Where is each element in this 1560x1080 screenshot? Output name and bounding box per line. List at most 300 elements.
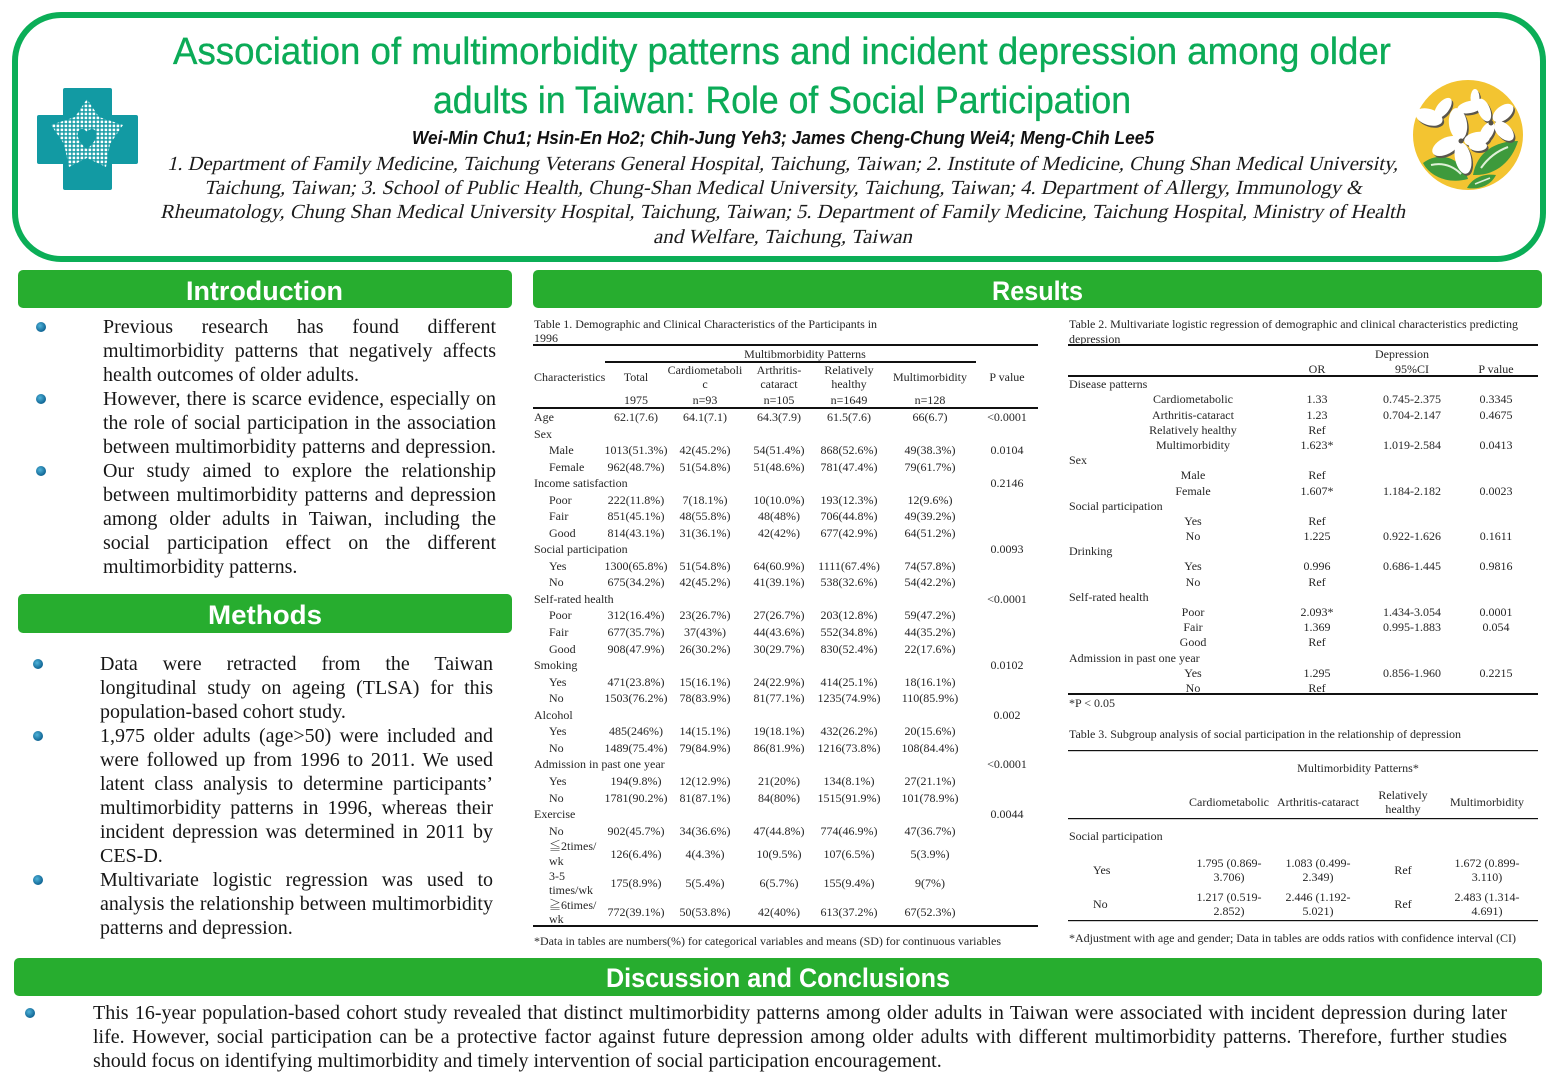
table 3 body rows: Yes	[1093, 863, 1111, 877]
table 1 body rows: Admission in past one year	[534, 757, 665, 771]
section heading: Methods: Methods	[208, 600, 322, 630]
table 2 body rows	[1069, 377, 1512, 695]
table 2 body rows: Drinking	[1069, 544, 1112, 558]
table 2 column headers: P value	[1478, 362, 1514, 376]
text block: introduction: multimorbidity patterns that negatively affects	[103, 340, 496, 362]
section heading: Methods	[18, 594, 512, 633]
table 1 body rows: 81(87.1%)	[680, 791, 730, 805]
text block: methods: CES-D.	[100, 845, 163, 867]
table 1 body rows: 44(43.6%)	[754, 625, 804, 639]
table 2 body rows: No	[1186, 681, 1200, 695]
table 1 body rows: 48(48%)	[758, 509, 800, 523]
table 2 caption: Table 2. Multivariate logistic regression of demographic and clinical characteristics predicting	[1069, 317, 1518, 331]
table 3 column headers	[1189, 761, 1524, 816]
table 2 caption	[1069, 317, 1518, 346]
table 1 body rows: 0.0044	[990, 807, 1024, 821]
table 3 body rows: No	[1093, 897, 1108, 911]
table 1 body rows: 6(5.7%)	[760, 876, 798, 890]
table 1 body rows: 10(9.5%)	[756, 847, 802, 861]
table 1 body rows: 1235(74.9%)	[818, 691, 880, 705]
section heading: Discussion and Conclusions	[14, 958, 1542, 996]
table 1 body rows: wk	[549, 854, 564, 868]
table 1 body rows: 66(6.7)	[912, 410, 948, 424]
table 2 body rows: Ref	[1308, 681, 1326, 695]
table 1 body rows: 27(26.7%)	[754, 608, 804, 622]
table 1 body rows: 0.0093	[990, 542, 1024, 556]
table 2 body rows: Fair	[1183, 620, 1203, 634]
section heading: Introduction: Introduction	[186, 276, 343, 306]
section heading: Results: Results	[992, 276, 1083, 306]
table 1 body rows: 79(84.9%)	[680, 741, 730, 755]
table 2 body rows: Ref	[1308, 468, 1326, 482]
table 1 body rows: 51(48.6%)	[754, 460, 804, 474]
table 1 column headers: 1975	[624, 393, 648, 407]
table 1 body rows: 42(40%)	[758, 905, 800, 919]
table 1 column headers: Multimorbidity	[893, 370, 967, 384]
table 1 body rows: 64(51.2%)	[904, 526, 956, 540]
table 1 rules	[533, 344, 1038, 927]
table 2 column headers: Depression	[1375, 347, 1429, 361]
table 1 body rows: No	[549, 824, 564, 838]
text block: methods	[100, 653, 493, 939]
text block: discussion and conclusions: This 16-year population-based cohort study revealed that distinct multimorbidity patterns among older adults in Taiwan were associated with incident depression during later	[93, 1002, 1507, 1024]
text block: methods: analysis the relationship between multimorbidity	[100, 893, 493, 915]
header panel	[15, 15, 1543, 259]
table 2 body rows: Yes	[1184, 559, 1202, 573]
table 1 body rows: 44(35.2%)	[904, 625, 956, 639]
table 1 body rows: 27(21.1%)	[904, 774, 956, 788]
table 1 body rows: 41(39.1%)	[754, 575, 804, 589]
table 2 body rows: Female	[1175, 484, 1211, 498]
table 1 body rows: 9(7%)	[915, 876, 945, 890]
table 1 body rows: Poor	[549, 608, 572, 622]
table 3 body rows: 5.021)	[1302, 904, 1334, 918]
table 1 body rows: Age	[534, 410, 554, 424]
table 1 caption: Table 1. Demographic and Clinical Characteristics of the Participants in	[534, 317, 877, 331]
table 1 body rows: 51(54.8%)	[680, 559, 730, 573]
table 1 body rows: 538(32.6%)	[820, 575, 878, 589]
header border	[15, 15, 1543, 259]
table 1 body rows: 902(45.7%)	[608, 824, 664, 838]
table 1 body rows: 203(12.8%)	[820, 608, 878, 622]
text block: methods: multimorbidity patterns in 1996, whereas their	[100, 797, 493, 819]
table 2 body rows: 1.623*	[1300, 438, 1334, 452]
table 2 body rows: 0.686-1.445	[1383, 559, 1441, 573]
table 3 column headers: Cardiometabolic	[1189, 795, 1269, 809]
table 1 body rows: 59(47.2%)	[904, 608, 956, 622]
section heading: Introduction	[18, 270, 512, 308]
table 3 body rows: 3.110)	[1472, 870, 1502, 884]
table 3 body rows: 2.852)	[1214, 904, 1244, 918]
table 1 body rows: 0.0102	[990, 658, 1024, 672]
table 1 body rows: ≧6times/	[549, 898, 597, 912]
table 1 column headers: Relatively	[824, 363, 874, 377]
table 2 body rows: Good	[1180, 635, 1206, 649]
text block: introduction: among older adults in Taiwan, including the	[103, 508, 496, 530]
table 1 body rows: 1111(67.4%)	[818, 559, 880, 573]
table 1 column headers: Total	[624, 370, 649, 384]
table 1 body rows: 0.0104	[990, 443, 1024, 457]
title: Association of multimorbidity patterns and incident depression among older	[173, 31, 1391, 73]
table 1 body rows: 101(78.9%)	[902, 791, 958, 805]
table 3 column headers: Arthritis-cataract	[1277, 795, 1360, 809]
affiliations	[159, 153, 1409, 248]
table 1 body rows: 0.002	[994, 708, 1020, 722]
table 1 body rows: 14(15.1%)	[680, 724, 730, 738]
table 2 body rows: 1.369	[1304, 620, 1330, 634]
icon: petal shadows	[1415, 91, 1519, 177]
table 1 body rows: 47(36.7%)	[904, 824, 956, 838]
table 1 body rows: 24(22.9%)	[754, 675, 804, 689]
section heading: Discussion and Conclusions: Discussion and Conclusions	[606, 963, 950, 993]
table 1 body rows: 37(43%)	[684, 625, 726, 639]
table 1 body rows: 49(39.2%)	[904, 509, 956, 523]
text block: introduction: However, there is scarce evidence, especially on	[103, 388, 496, 410]
table 1 body rows: No	[549, 575, 564, 589]
table 1 body rows: 552(34.8%)	[820, 625, 878, 639]
table 1 body rows: 414(25.1%)	[820, 675, 878, 689]
table 1 body rows: 471(23.8%)	[608, 675, 664, 689]
table 1 body rows: 1515(91.9%)	[818, 791, 880, 805]
table 2 body rows: No	[1186, 529, 1200, 543]
table 3 body rows: 1.083 (0.499-	[1286, 856, 1350, 870]
icon: hospital cross logo	[37, 88, 138, 190]
table 1 body rows: Good	[549, 526, 576, 540]
table 2 body rows: No	[1186, 575, 1200, 589]
table 1 body rows: 21(20%)	[758, 774, 800, 788]
table 1 column headers: Characteristics	[534, 370, 606, 384]
table 1 body rows: 20(15.6%)	[904, 724, 956, 738]
table 1 body rows: times/wk	[549, 883, 593, 897]
table 3 column headers: Multimorbidity	[1450, 795, 1524, 809]
table 1 body rows: 868(52.6%)	[820, 443, 878, 457]
table 3 column headers: Relatively	[1378, 788, 1428, 802]
table 1 body rows: 47(44.8%)	[754, 824, 804, 838]
table 1 body rows: 5(3.9%)	[910, 847, 950, 861]
table 1 body rows: 5(5.4%)	[686, 876, 724, 890]
table 1 body rows: 49(38.3%)	[904, 443, 956, 457]
table 1 body rows: Good	[549, 642, 576, 656]
table 1 body rows: 22(17.6%)	[904, 642, 956, 656]
table 3 body rows: 1.217 (0.519-	[1196, 890, 1262, 904]
table 1 body rows: 15(16.1%)	[680, 675, 730, 689]
table 1 body rows: 19(18.1%)	[754, 724, 804, 738]
table 2 body rows: 0.704-2.147	[1383, 408, 1441, 422]
table 1 body rows	[534, 410, 1027, 926]
table 1 body rows: 772(39.1%)	[608, 905, 664, 919]
affiliations: Rheumatology, Chung Shan Medical University Hospital, Taichung, Taiwan; 5. Department of Family Medicine, Taichung Hospital, Ministry of Health	[159, 201, 1409, 223]
table 3 column headers: healthy	[1385, 802, 1421, 816]
table 1 column headers: cataract	[760, 377, 798, 391]
table 1 body rows: 706(44.8%)	[820, 509, 878, 523]
table 1 body rows: 64.1(7.1)	[683, 410, 727, 424]
table 1 body rows: 30(29.7%)	[754, 642, 804, 656]
table 1 body rows: 61.5(7.6)	[827, 410, 871, 424]
table 1 body rows: 0.2146	[990, 476, 1024, 490]
table 1 body rows: No	[549, 791, 564, 805]
table 2 body rows: 1.295	[1304, 666, 1330, 680]
table 1 column headers: n=93	[693, 393, 717, 407]
text block: methods: Multivariate logistic regression was used to	[100, 869, 493, 891]
icon: petals	[1413, 89, 1517, 175]
table 2 body rows: 0.745-2.375	[1383, 392, 1441, 406]
table 1 body rows: 851(45.1%)	[608, 509, 664, 523]
table 2 body rows: 0.996	[1304, 559, 1330, 573]
text block: introduction: Previous research has found different	[103, 316, 496, 338]
table 1 body rows: 78(83.9%)	[680, 691, 730, 705]
table 2 body rows: Disease patterns	[1069, 377, 1148, 391]
title: adults in Taiwan: Role of Social Participation	[433, 80, 1131, 122]
table 1 body rows: 12(9.6%)	[908, 493, 952, 507]
table 2 body rows: 1.23	[1306, 408, 1328, 422]
table 3 footnote: *Adjustment with age and gender; Data in tables are odds ratios with confidence interval (CI)	[1069, 931, 1516, 945]
table 2 body rows: 1.019-2.584	[1383, 438, 1441, 452]
table 1 body rows: <0.0001	[987, 410, 1027, 424]
table 1 body rows: No	[549, 691, 564, 705]
table 1 body rows: Exercise	[534, 807, 575, 821]
authors: Wei-Min Chu1; Hsin-En Ho2; Chih-Jung Yeh3; James Cheng-Chung Wei4; Meng-Chih Lee5	[412, 128, 1155, 148]
table 1 body rows: 677(42.9%)	[820, 526, 878, 540]
table 1 column headers: n=105	[764, 393, 794, 407]
table 1 body rows: 485(246%)	[609, 724, 663, 738]
table 2 body rows: Ref	[1308, 423, 1326, 437]
table 1 body rows: 134(8.1%)	[824, 774, 874, 788]
table 1 body rows: 312(16.4%)	[608, 608, 664, 622]
table 2 body rows: Ref	[1308, 635, 1326, 649]
text block: methods: 1,975 older adults (age>50) were included and	[100, 725, 493, 747]
table 2 column headers: OR	[1309, 362, 1325, 376]
text block: methods: were followed up from 1996 to 2011. We used	[100, 749, 493, 771]
table 1 body rows: 79(61.7%)	[904, 460, 956, 474]
table 2 body rows: Self-rated health	[1069, 590, 1149, 604]
icon: leaves	[1423, 141, 1518, 188]
table 1 body rows: 4(4.3%)	[686, 847, 724, 861]
table 1 body rows: 84(80%)	[758, 791, 800, 805]
table 1 body rows: wk	[549, 912, 564, 926]
table 1 body rows: Smoking	[534, 658, 577, 672]
table 1 body rows: 613(37.2%)	[820, 905, 878, 919]
table 1 body rows: 51(54.8%)	[680, 460, 730, 474]
table 3 body rows: Social participation	[1069, 829, 1163, 843]
table 2 body rows: Ref	[1308, 514, 1326, 528]
table 1 body rows: 34(36.6%)	[680, 824, 730, 838]
affiliations: Taichung, Taiwan; 3. School of Public Health, Chung-Shan Medical University, Taichung, Taiwan; 4. Department of Allergy, Immunology &	[203, 177, 1366, 199]
table 2 body rows: Male	[1181, 468, 1205, 482]
text block: introduction: the role of social participation in the association	[103, 412, 496, 434]
table 3 body rows: 4.691)	[1472, 904, 1502, 918]
table 2 body rows: Admission in past one year	[1069, 651, 1200, 665]
table 1 body rows: 774(46.9%)	[820, 824, 878, 838]
table 1 body rows: Yes	[549, 675, 567, 689]
table 1 body rows: 107(6.5%)	[824, 847, 874, 861]
table 1 body rows: 1489(75.4%)	[604, 741, 668, 755]
table 3 body rows: 3.706)	[1214, 870, 1244, 884]
table 3 body rows: 1.795 (0.869-	[1196, 856, 1262, 870]
table 1 body rows: 54(42.2%)	[904, 575, 956, 589]
table 1 column headers: n=1649	[831, 393, 867, 407]
table 1 body rows: 42(45.2%)	[680, 575, 730, 589]
table 2 body rows: 0.0023	[1480, 484, 1512, 498]
panel: table 3	[1068, 727, 1538, 945]
table 1 body rows: 222(11.8%)	[608, 493, 664, 507]
table 2 body rows: Ref	[1308, 575, 1326, 589]
table 2 rules	[1068, 344, 1538, 695]
table 2 caption: depression	[1069, 332, 1120, 346]
table 2 body rows: Yes	[1184, 514, 1202, 528]
table 1 body rows: ≦2times/	[549, 839, 597, 853]
table 2 body rows: 1.33	[1306, 392, 1328, 406]
text block: methods: longitudinal study on ageing (TLSA) for this	[100, 677, 493, 699]
table 3 column headers: Multimorbidity Patterns*	[1297, 761, 1419, 775]
table 1 body rows: Alcohol	[534, 708, 573, 722]
table 2 body rows: 0.9816	[1480, 559, 1512, 573]
table 1 body rows: 10(10.0%)	[754, 493, 804, 507]
table 1 body rows: Income satisfaction	[534, 476, 628, 490]
table 2 body rows: 0.054	[1482, 620, 1510, 634]
panel: table 1	[533, 317, 1038, 948]
table 2 body rows: 1.434-3.054	[1383, 605, 1441, 619]
table 2 body rows: 1.184-2.182	[1383, 484, 1441, 498]
table 2 body rows: 0.922-1.626	[1383, 529, 1441, 543]
table 1 column headers: Cardiometaboli	[668, 363, 743, 377]
table 1 body rows: 12(12.9%)	[680, 774, 730, 788]
table 1 body rows: 675(34.2%)	[608, 575, 664, 589]
bullets	[25, 322, 46, 1018]
table 1 body rows: 1300(65.8%)	[604, 559, 668, 573]
panel: table 2	[1068, 317, 1538, 710]
table 1 body rows: 74(57.8%)	[904, 559, 956, 573]
table 2 column headers	[1309, 347, 1514, 376]
text block: introduction: Our study aimed to explore the relationship	[103, 460, 496, 482]
table 2 body rows: 1.607*	[1300, 484, 1334, 498]
table 1 body rows: 175(8.9%)	[610, 876, 662, 890]
text block: introduction: between multimorbidity patterns and depression.	[103, 436, 496, 458]
table 1 body rows: 781(47.4%)	[820, 460, 878, 474]
table 1 body rows: 110(85.9%)	[902, 691, 958, 705]
table 2 body rows: Poor	[1182, 605, 1204, 619]
table 1 body rows: Social participation	[534, 542, 628, 556]
table 2 body rows: Multimorbidity	[1156, 438, 1230, 452]
text block: methods: Data were retracted from the Taiwan	[100, 653, 493, 675]
table 1 body rows: 830(52.4%)	[820, 642, 878, 656]
table 3 body rows: 2.483 (1.314-	[1454, 890, 1520, 904]
table 1 body rows: 814(43.1%)	[608, 526, 664, 540]
table 1 body rows: Sex	[534, 427, 552, 441]
text block: discussion and conclusions	[93, 1002, 1507, 1072]
text block: introduction: multimorbidity patterns.	[103, 556, 297, 578]
table 2 footnote: *P < 0.05	[1069, 696, 1115, 710]
table 3 body rows	[1069, 829, 1520, 918]
affiliations: 1. Department of Family Medicine, Taichung Veterans General Hospital, Taichung, Taiwan; 2. Institute of Medicine, Chung Shan Medical University,	[166, 153, 1402, 175]
text block: methods: population-based cohort study.	[100, 701, 346, 723]
text block: introduction	[103, 316, 496, 578]
table 1 body rows: Fair	[549, 625, 568, 639]
table 1 footnote: *Data in tables are numbers(%) for categorical variables and means (SD) for continuous variables	[534, 934, 1001, 948]
table 2 column headers: 95%CI	[1395, 362, 1429, 376]
text block: introduction: between multimorbidity patterns and depression	[103, 484, 496, 506]
table 2 body rows: 0.0413	[1480, 438, 1512, 452]
table 1 body rows: 64.3(7.9)	[757, 410, 801, 424]
table 1 column headers: P value	[989, 370, 1025, 384]
table 1 body rows: No	[549, 741, 564, 755]
table 1 column headers: healthy	[831, 377, 867, 391]
table 1 body rows: Yes	[549, 724, 567, 738]
table 1 column headers: n=128	[915, 393, 945, 407]
text block: methods: latent class analysis to determine participants’	[100, 773, 493, 795]
table 2 body rows: 0.1611	[1480, 529, 1512, 543]
table 1 body rows: 81(77.1%)	[754, 691, 804, 705]
table 1 body rows: 7(18.1%)	[682, 493, 728, 507]
table 2 body rows: Yes	[1184, 666, 1202, 680]
table 1 body rows: 108(84.4%)	[902, 741, 958, 755]
title	[173, 31, 1391, 122]
table 1 body rows: 3-5	[549, 869, 565, 883]
table 1 body rows: Self-rated health	[534, 592, 614, 606]
text block: methods: incident depression was determined in 2011 by	[100, 821, 493, 843]
table 1 body rows: Poor	[549, 493, 572, 507]
table 1 body rows: Yes	[549, 774, 567, 788]
table 1 body rows: 31(36.1%)	[680, 526, 730, 540]
table 1 body rows: <0.0001	[987, 592, 1027, 606]
table 1 body rows: Male	[549, 443, 574, 457]
table 1 body rows: 67(52.3%)	[904, 905, 956, 919]
table 1 body rows: 1503(76.2%)	[604, 691, 668, 705]
table 2 body rows: 2.093*	[1300, 605, 1334, 619]
table 1 body rows: <0.0001	[987, 757, 1027, 771]
table 1 body rows: 42(42%)	[758, 526, 800, 540]
table 1 body rows: 962(48.7%)	[608, 460, 664, 474]
table 3 body rows: Ref	[1394, 863, 1412, 877]
table 2 body rows: Sex	[1069, 453, 1087, 467]
text block: discussion and conclusions: life. However, social participation can be a protective factor against future depression among older adults with different multimorbidity patterns. Therefore, further studies	[93, 1026, 1507, 1048]
table 3 body rows: Ref	[1394, 897, 1412, 911]
table 1 body rows: 64(60.9%)	[754, 559, 804, 573]
table 2 body rows: 0.2215	[1480, 666, 1512, 680]
table 2 body rows: Social participation	[1069, 499, 1163, 513]
table 1 body rows: 23(26.7%)	[680, 608, 730, 622]
table 3 body rows: 2.349)	[1302, 870, 1334, 884]
text block: introduction: social participation effect on the different	[103, 532, 496, 554]
table 2 body rows: 0.856-1.960	[1383, 666, 1441, 680]
section heading: Results	[533, 270, 1542, 308]
table 3 body rows: 1.672 (0.899-	[1454, 856, 1520, 870]
table 1 body rows: 193(12.3%)	[820, 493, 878, 507]
table 1 body rows: Fair	[549, 509, 568, 523]
table 1 caption	[534, 317, 877, 345]
table 1 body rows: 677(35.7%)	[608, 625, 664, 639]
table 1 column headers	[534, 347, 1025, 407]
table 1 body rows: 126(6.4%)	[610, 847, 662, 861]
table 1 body rows: 155(9.4%)	[824, 876, 874, 890]
table 1 column headers: Arthritis-	[757, 363, 801, 377]
table 1 body rows: 18(16.1%)	[904, 675, 956, 689]
table 1 body rows: Yes	[549, 559, 567, 573]
table 1 body rows: 26(30.2%)	[680, 642, 730, 656]
table 3 body rows: 2.446 (1.192-	[1286, 890, 1350, 904]
table 3 caption: Table 3. Subgroup analysis of social participation in the relationship of depression	[1069, 727, 1461, 741]
table 2 body rows: Arthritis-cataract	[1152, 408, 1235, 422]
table 1 body rows: 908(47.9%)	[608, 642, 664, 656]
table 1 body rows: 48(55.8%)	[680, 509, 730, 523]
table 3 rules	[1068, 750, 1538, 921]
table 1 caption: 1996	[534, 331, 558, 345]
table 1 body rows: 54(51.4%)	[754, 443, 804, 457]
table 1 body rows: Female	[549, 460, 584, 474]
table 1 body rows: 432(26.2%)	[820, 724, 878, 738]
table 1 body rows: 62.1(7.6)	[614, 410, 658, 424]
table 2 body rows: 0.4675	[1480, 408, 1512, 422]
table 2 body rows: 0.0001	[1480, 605, 1512, 619]
